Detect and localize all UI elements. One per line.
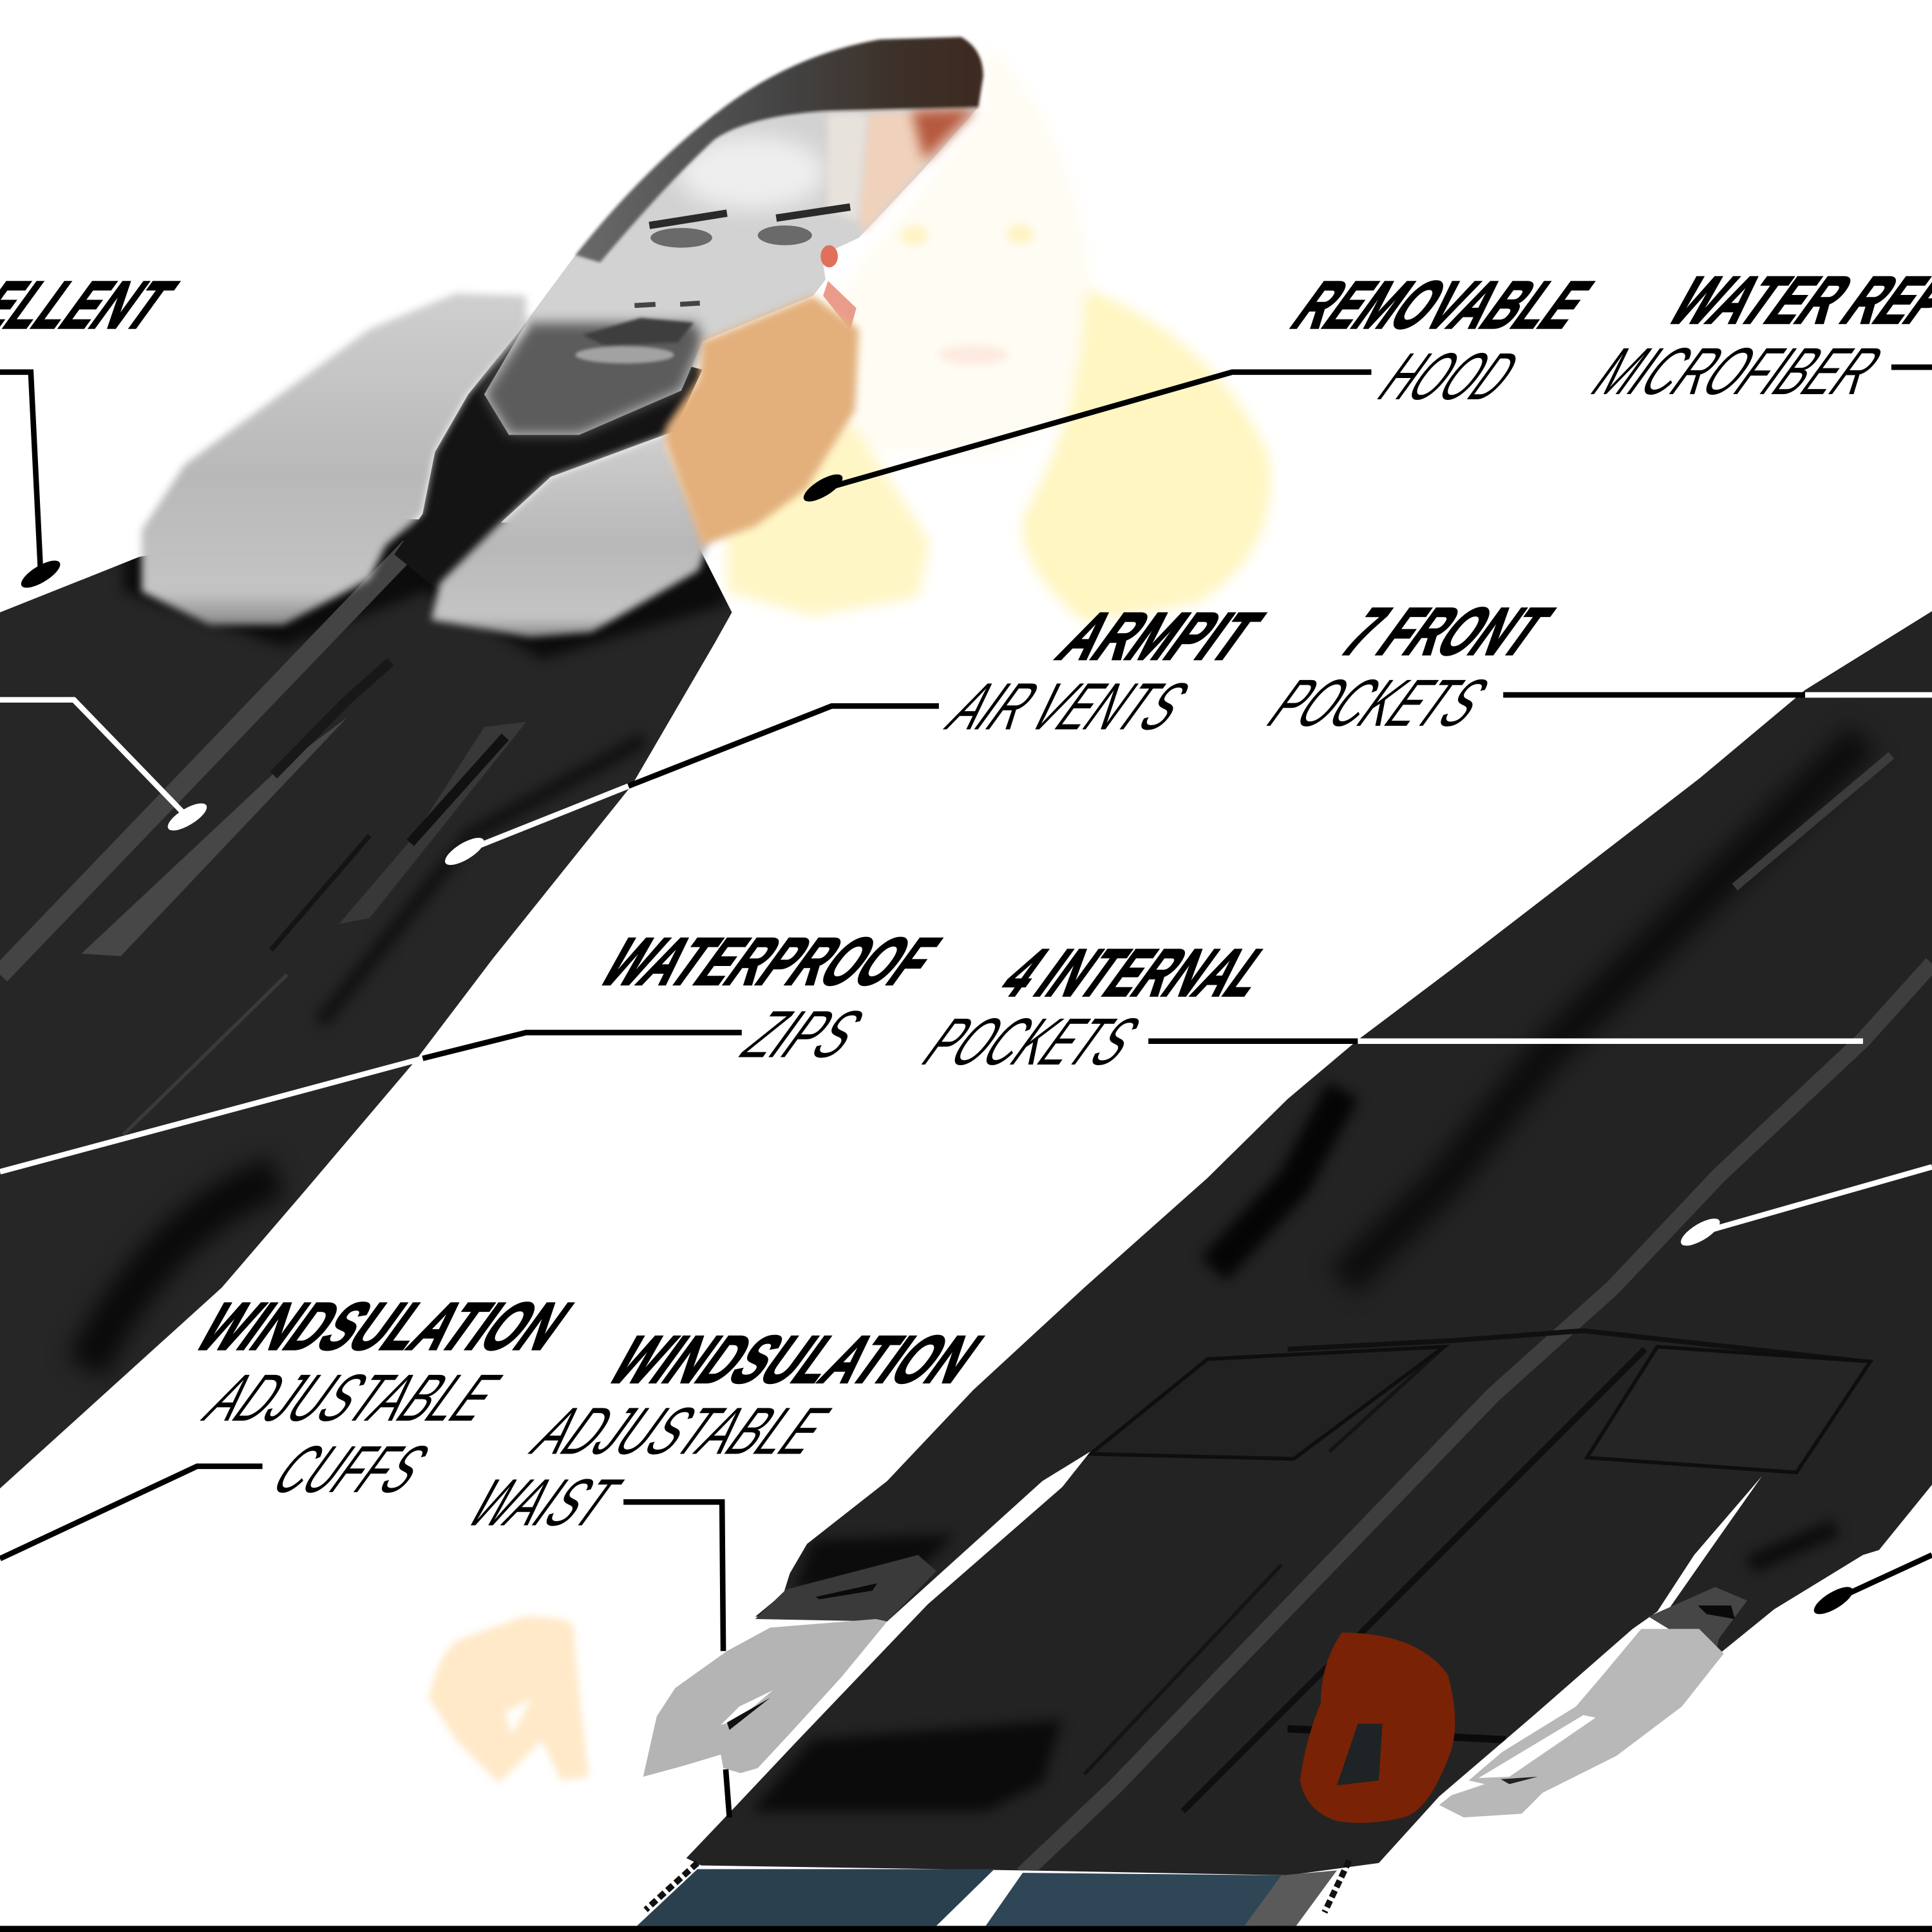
ear [820,245,838,267]
right lower pocket edge [1287,1728,1506,1740]
bottom bar [0,1926,1932,1932]
fur collar left [142,293,526,625]
finger gap [1479,1715,1596,1778]
callout: adjustable cuffs line [0,1466,263,1558]
shoulder fold band [1343,738,1863,1282]
label: pockets: POCKETS [1253,666,1505,740]
left hand [643,1619,887,1777]
callout: water repellent left line [0,372,68,588]
callout: waterproof zips line [0,1032,742,1172]
eyes [650,228,712,248]
fur collar right [431,431,708,637]
label: zips: ZIPS [726,997,880,1072]
left jacket placket [81,717,348,956]
callout: 7 front pockets line [1503,694,1932,696]
label: adjustable cuffs: ADJUSTABLE [189,1361,517,1435]
zip stitching [123,974,287,1135]
callout: microfiber line [1891,366,1932,368]
waist seam [1287,1331,1863,1361]
sleeve folds [1214,1090,1343,1269]
lower pocket shadow [752,1720,1062,1811]
label: waterproof: WATERPROOF [585,924,954,999]
right cuff [1649,1587,1747,1657]
label: windsulation cuffs: WINDSULATION [180,1289,587,1363]
mouth [575,346,674,363]
label: waist: WAIST [451,1465,636,1540]
ghost red patch [1300,1633,1455,1823]
jacket right portion with sleeves [687,611,1932,1875]
left cuff fold shadow [795,1534,955,1589]
forehead highlight [677,135,826,209]
label: 4 internal: 4 INTERNAL [985,936,1289,1010]
armpit fold [320,739,645,1023]
label: 7 front: 7 FRONT [1327,594,1567,668]
beard [484,323,703,435]
pocket flap right [1587,1347,1870,1472]
pocket flap left [1090,1347,1444,1459]
nostrils [634,303,700,305]
label: pockets lower: POCKETS [907,1005,1157,1079]
left jacket zip strip [0,547,410,974]
small chest zip [1735,755,1891,887]
chest pocket zip [274,661,391,775]
callout: white pointer lower right [1672,1167,1932,1245]
hair [575,37,983,263]
label: cuffs: CUFFS [257,1432,446,1506]
callout: removable hood line [795,372,1371,502]
fur shadow [123,530,727,659]
fur collar tan [665,296,859,546]
face [484,107,978,435]
callout: left white pointer [0,700,215,831]
label: removable: REMOVABLE [1277,268,1607,342]
main front zip [1023,963,1932,1874]
label: hood: HOOD [1363,339,1536,413]
armpit pocket flap [339,722,526,924]
neck [394,323,703,591]
callout: air vents line [437,706,939,865]
ghost orange hand [429,1616,589,1783]
label: adjustable waist: ADJUSTABLE [517,1394,846,1468]
lower fold [86,1177,277,1368]
eyebrows [649,207,850,225]
ghost: pale face and hood fur [727,43,1271,622]
jacket left portion [0,518,732,1488]
label: armpit: ARMPIT [1043,599,1277,674]
label: windsulation waist: WINDSULATION [593,1322,998,1397]
moustache [583,318,694,345]
left cuff [755,1555,936,1622]
right sleeve fold [1750,1528,1836,1565]
jeans [637,1869,1337,1926]
label: air vents: AIR VENTS [932,669,1206,744]
callout: adjustable cuffs pointer right [1806,1555,1932,1614]
temple tint [858,111,973,234]
right hand [1439,1629,1724,1817]
stitched lettering [271,835,370,950]
callout: internal pockets line [1148,1039,1863,1043]
callout: adjustable waist line [623,1502,730,1817]
finger gap [721,1690,773,1725]
drawstrings [646,1861,1349,1912]
dark placket line [1183,1349,1645,1811]
